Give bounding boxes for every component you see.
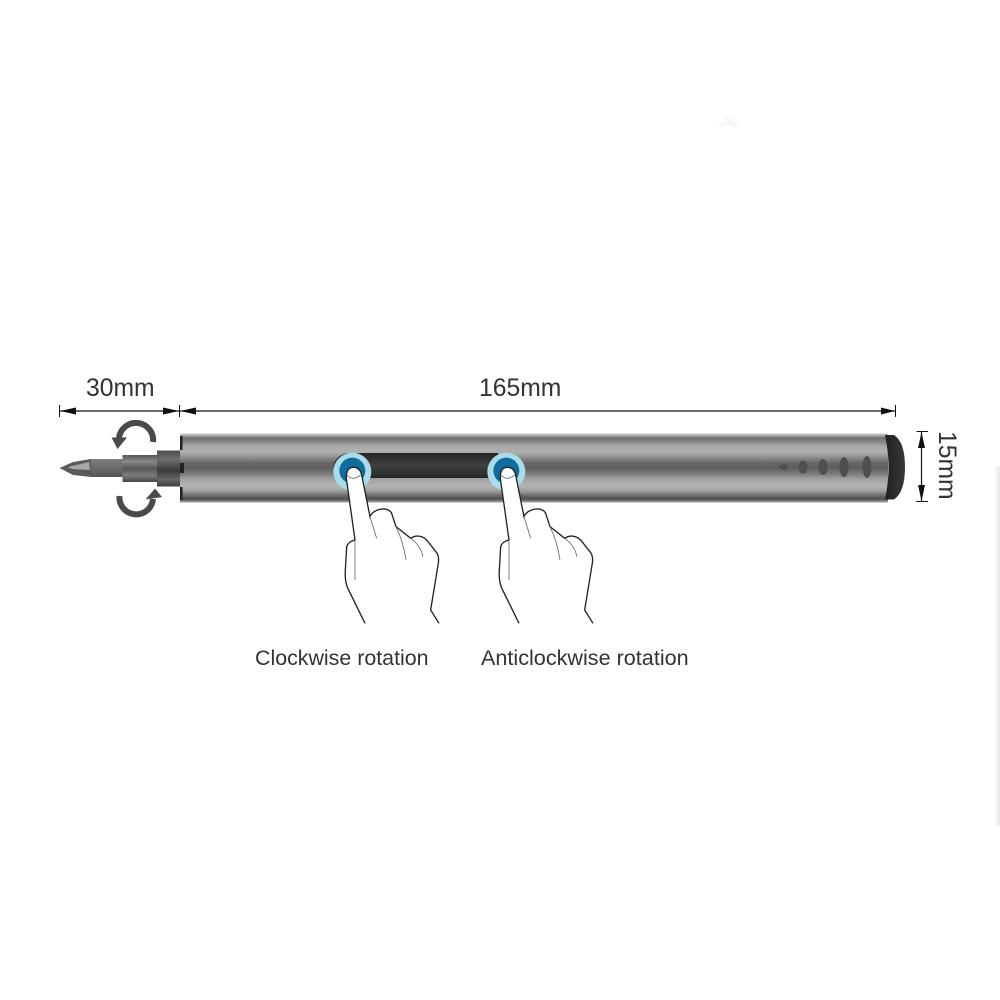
right edge artefact — [994, 466, 1000, 826]
handle body — [180, 434, 888, 502]
dimension: 30mm: 30mm — [86, 375, 155, 402]
faint smudge — [718, 117, 740, 128]
hand: anticlockwise — [487, 453, 593, 623]
dimension: 165mm — [180, 375, 896, 417]
end cap — [885, 435, 905, 500]
hand outline — [499, 467, 593, 623]
dimension: 15mm — [916, 431, 960, 502]
dimension: 165mm: 165mm — [479, 375, 561, 402]
touch ring — [333, 453, 371, 491]
bit shaft — [91, 459, 123, 477]
bit tip — [60, 459, 91, 477]
label: anticlockwise rotation: Anticlockwise rotation — [481, 645, 689, 670]
rotation arrow: top — [112, 423, 153, 449]
chuck collar — [122, 455, 158, 482]
dimension: 30mm — [60, 375, 180, 417]
chuck base — [157, 450, 181, 486]
label: clockwise rotation: Clockwise rotation — [255, 646, 429, 670]
touch ring — [487, 453, 525, 491]
hand: clockwise — [333, 453, 439, 623]
vent holes — [778, 456, 872, 478]
screwdriver — [60, 434, 905, 502]
dimension: 15mm: 15mm — [933, 431, 960, 500]
rotation arrow: bottom — [119, 488, 162, 514]
handle front edge — [180, 436, 184, 500]
hand outline — [345, 467, 439, 623]
touch button strip — [333, 453, 503, 478]
bit highlight — [68, 462, 90, 470]
